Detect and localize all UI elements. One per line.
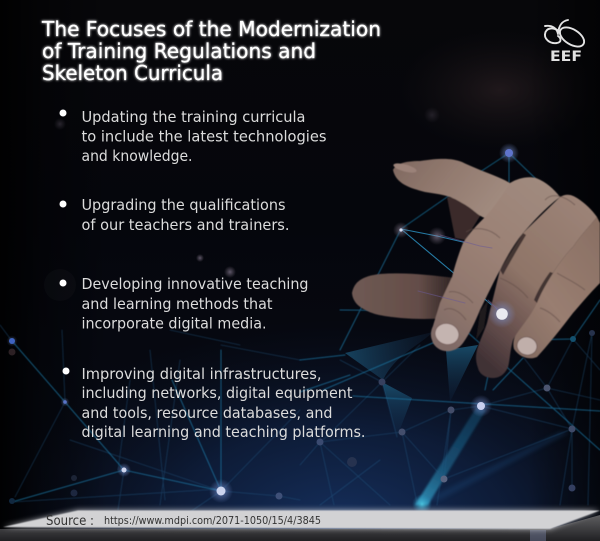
bullet 1: Updating the training curricula — [82, 108, 306, 126]
bullet 4: and tools, resource databases, and — [82, 404, 332, 422]
overlay mesh lines over the hand — [418, 235, 502, 314]
title: Skeleton Curricula — [42, 61, 223, 85]
upper finger — [393, 159, 510, 218]
wordmark: EEF — [550, 49, 582, 65]
icon: butterfly — [545, 20, 587, 51]
glowing nodes — [6, 107, 595, 514]
network mesh of lines and nodes — [0, 153, 600, 512]
bullet list — [60, 108, 366, 441]
bullet 2: Upgrading the qualifications — [82, 196, 286, 214]
bullet 4: digital learning and teaching platforms. — [82, 423, 366, 441]
source bar — [0, 510, 600, 541]
title: The Focuses of the Modernization — [41, 17, 381, 41]
bullet 1: and knowledge. — [82, 147, 192, 165]
finger gap shadows — [476, 233, 553, 340]
title — [41, 17, 381, 85]
knuckle creases — [444, 196, 585, 322]
title: of Training Regulations and — [42, 39, 316, 63]
index finger — [431, 177, 560, 351]
translucent mesh triangles — [345, 332, 570, 505]
source url: https://www.mdpi.com/2071-1050/15/4/3845 — [104, 514, 321, 527]
hand pointing with fingers — [352, 159, 600, 378]
bullet 4: including networks, digital equipment — [82, 384, 353, 402]
bullet 1 — [60, 108, 327, 165]
middle finger — [476, 195, 597, 378]
bullet 1: to include the latest technologies — [82, 128, 327, 146]
underside highlight — [530, 530, 546, 541]
bullet 4: Improving digital infrastructures, — [82, 365, 322, 383]
bullet 3: incorporate digital media. — [82, 314, 266, 332]
bar glow — [3, 510, 600, 529]
logo: EEF butterfly — [545, 20, 587, 65]
bullet 4 — [62, 365, 366, 441]
bullet 3: Developing innovative teaching — [82, 275, 308, 293]
thumb — [352, 273, 455, 319]
third finger — [513, 217, 600, 358]
bar underside — [0, 515, 600, 541]
bar top surface — [3, 510, 600, 529]
bullet 3 — [60, 275, 308, 332]
bullet 2: of our teachers and trainers. — [82, 216, 290, 234]
shadow under upper finger — [447, 197, 487, 240]
source label: Source : — [46, 514, 94, 529]
bullet 3: and learning methods that — [82, 295, 273, 313]
fingernails — [433, 321, 461, 347]
bullet 2 — [60, 196, 290, 234]
